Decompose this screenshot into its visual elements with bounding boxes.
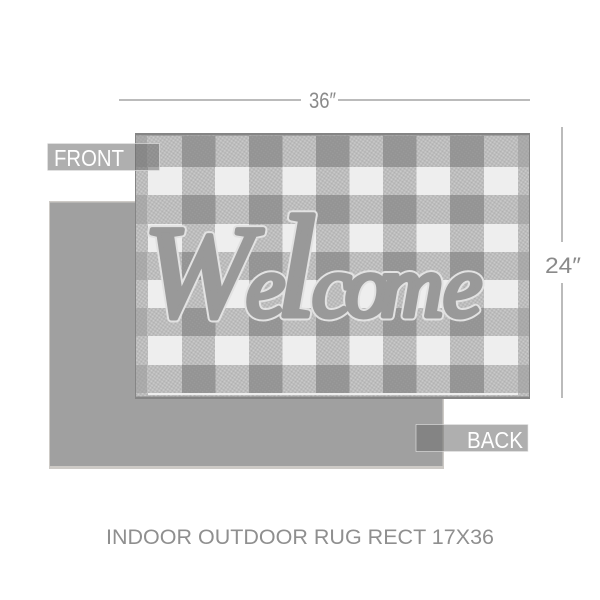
front label: FRONT	[54, 145, 124, 171]
buffalo check base	[136, 136, 529, 396]
welcome lettering: l	[276, 186, 317, 348]
back label: BACK	[467, 427, 523, 453]
width dimension 36 inches: 36″	[309, 88, 336, 113]
welcome lettering: e	[443, 239, 482, 336]
white check squares	[148, 167, 518, 395]
welcome lettering: c	[312, 239, 351, 336]
back label	[416, 424, 528, 453]
back rug	[49, 201, 444, 469]
front label	[48, 144, 160, 171]
welcome lettering: e	[246, 239, 285, 336]
front rug	[135, 133, 530, 399]
welcome lettering: l	[276, 186, 317, 348]
welcome lettering: m	[380, 239, 444, 336]
welcome lettering: c	[312, 239, 351, 336]
welcome lettering: e	[246, 239, 285, 336]
welcome lettering: e	[443, 239, 482, 336]
caption: INDOOR OUTDOOR RUG RECT 17X36	[106, 526, 494, 549]
welcome lettering: o	[345, 239, 389, 336]
dark check columns and rows	[182, 136, 484, 393]
side column shading	[136, 136, 529, 393]
height dimension 24 inches: 24″	[545, 253, 581, 278]
welcome lettering: W	[143, 198, 263, 345]
welcome lettering: m	[380, 239, 444, 336]
welcome lettering: W	[143, 198, 263, 345]
welcome lettering: o	[345, 239, 389, 336]
welcome lettering	[143, 186, 482, 348]
rug edge binding	[135, 133, 530, 399]
